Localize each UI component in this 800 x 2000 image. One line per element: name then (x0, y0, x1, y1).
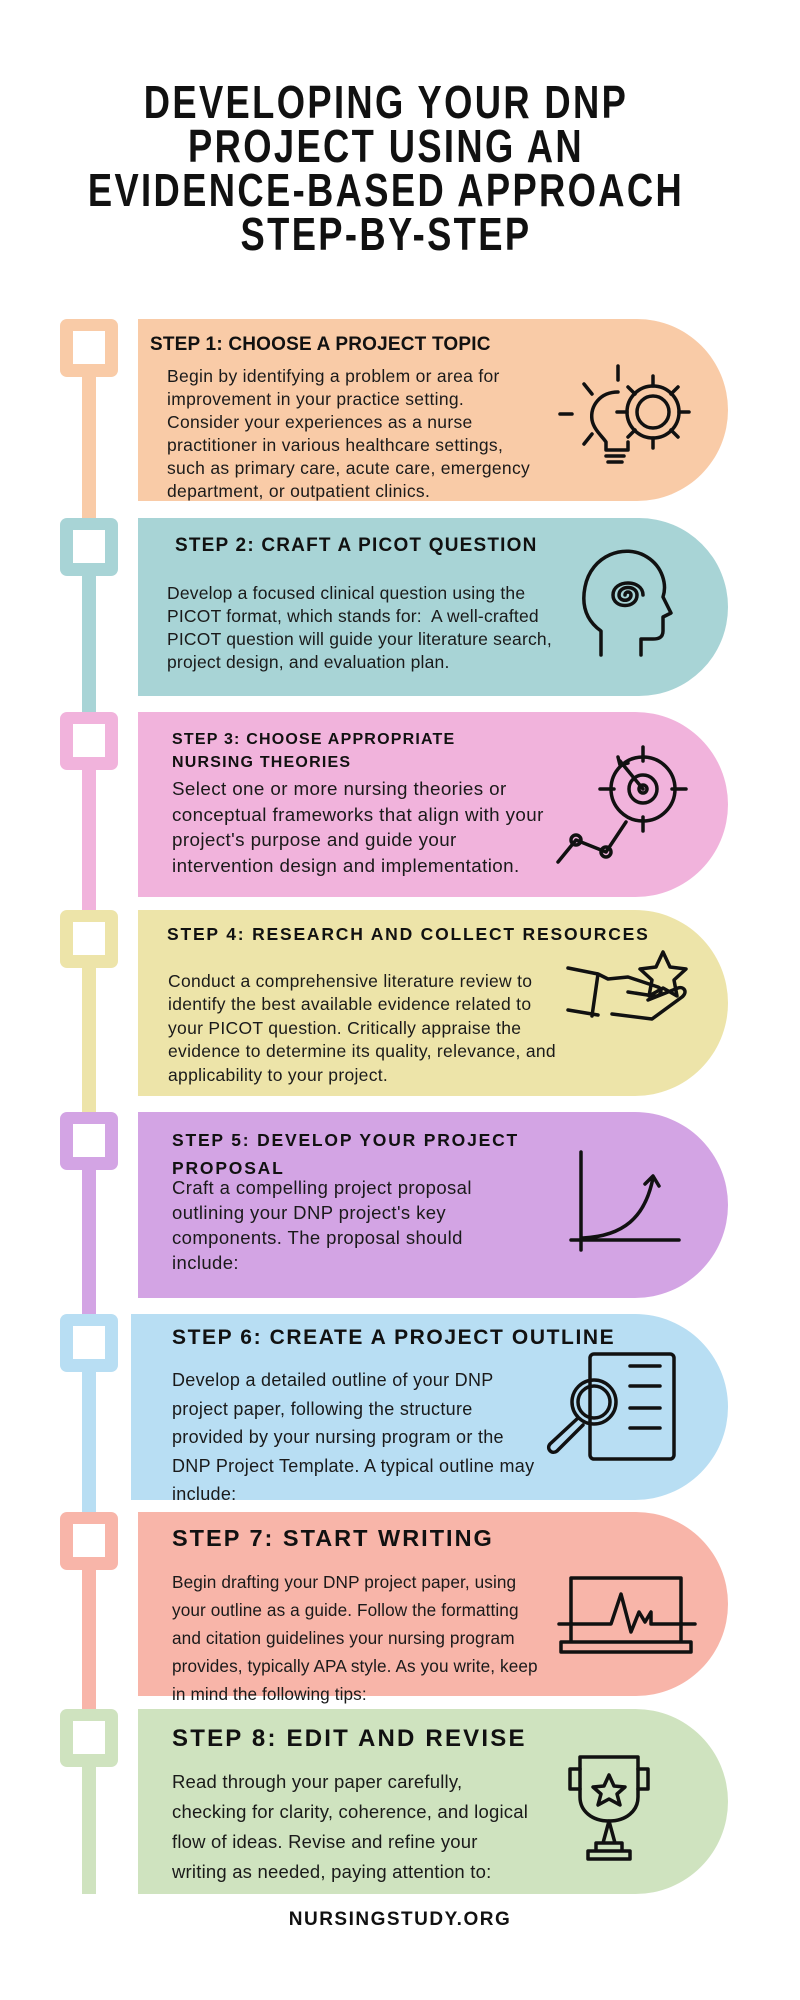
heading: step 3 (172, 731, 455, 771)
icon: document with magnifier (546, 1352, 676, 1461)
heading: step 3: STEP 3: CHOOSE APPROPRIATE (172, 731, 455, 748)
body: step 6: provided by your nursing program or the (172, 1427, 504, 1447)
heading: step 5: STEP 5: DEVELOP YOUR PROJECT (172, 1130, 519, 1150)
body: step 8: writing as needed, paying attention to: (172, 1861, 491, 1882)
heading: step 6: STEP 6: CREATE A PROJECT OUTLINE (172, 1326, 615, 1349)
icon: growth graph (569, 1150, 681, 1252)
heading: step 5: PROPOSAL (172, 1158, 285, 1178)
body: step 3: Select one or more nursing theories or (172, 778, 507, 799)
body: step 1: Begin by identifying a problem or area for (167, 366, 500, 386)
body: step 4: identify the best available evidence related to (168, 994, 531, 1014)
title: EVIDENCE-BASED APPROACH (88, 164, 684, 216)
panel: step 7 (138, 1512, 728, 1696)
body: step 8 (172, 1771, 528, 1882)
body: step 8: Read through your paper carefully, (172, 1771, 462, 1792)
body: step 8: flow of ideas. Revise and refine your (172, 1831, 478, 1852)
panel: step 1 (138, 319, 728, 501)
heading: step 2: STEP 2: CRAFT A PICOT QUESTION (175, 535, 538, 556)
title: PROJECT USING AN (188, 120, 584, 172)
body: step 6 (172, 1370, 534, 1504)
body: step 4: evidence to determine its quality, relevance, and (168, 1041, 556, 1061)
body: step 1 (167, 366, 530, 501)
icon: hand with star (566, 950, 688, 1021)
title (88, 76, 684, 260)
body: step 3: conceptual frameworks that align with your (172, 804, 544, 824)
heading: step 7: STEP 7: START WRITING (172, 1525, 494, 1551)
icon: trophy (568, 1755, 650, 1861)
body: step 3: project's purpose and guide your (172, 829, 457, 850)
heading: step 5 (172, 1130, 519, 1178)
panel: step 3 (138, 712, 728, 897)
body: step 6: DNP Project Template. A typical outline may (172, 1456, 534, 1476)
body: step 2: PICOT format, which stands for: A well-crafted (167, 606, 539, 626)
panel: step 8 (138, 1709, 728, 1894)
body: step 2 (167, 583, 552, 672)
body: step 4 (168, 971, 556, 1085)
body: step 1: practitioner in various healthcare settings, (167, 435, 503, 455)
panel: step 4 (138, 910, 728, 1096)
body: step 7: provides, typically APA style. As you write, keep (172, 1656, 538, 1676)
icon: laptop with heartbeat (557, 1576, 697, 1654)
body: step 5 (172, 1177, 472, 1273)
timeline connectors (60, 319, 118, 1894)
body: step 1: improvement in your practice setting. (167, 389, 464, 409)
body: step 7: your outline as a guide. Follow the formatting (172, 1600, 519, 1620)
heading: step 1: STEP 1: CHOOSE A PROJECT TOPIC (150, 334, 491, 355)
heading: step 3: NURSING THEORIES (172, 754, 351, 771)
body: step 1: Consider your experiences as a nurse (167, 412, 473, 432)
body: step 8: checking for clarity, coherence, and logical (172, 1801, 528, 1822)
body: step 2: project design, and evaluation plan. (167, 652, 450, 672)
body: step 5: Craft a compelling project proposal (172, 1177, 472, 1198)
body: step 7: and citation guidelines your nursing program (172, 1628, 515, 1648)
panel: step 5 (138, 1112, 728, 1298)
icon: head with spiral (582, 550, 673, 657)
body: step 6: project paper, following the structure (172, 1398, 473, 1418)
body: step 3: intervention design and implementation. (172, 854, 520, 876)
footer: NURSINGSTUDY.ORG (289, 1909, 511, 1930)
body: step 1: department, or outpatient clinics. (167, 481, 430, 501)
body: step 2: PICOT question will guide your literature search, (167, 629, 552, 649)
heading: step 4: STEP 4: RESEARCH AND COLLECT RESOURCES (167, 924, 650, 944)
icon: target (556, 745, 688, 864)
body: step 7 (172, 1572, 538, 1704)
panel: step 6 (131, 1314, 728, 1500)
title: STEP-BY-STEP (241, 208, 531, 260)
body: step 1: such as primary care, acute care, emergency (167, 458, 530, 478)
body: step 4: applicability to your project. (168, 1065, 388, 1085)
title: DEVELOPING YOUR DNP (144, 76, 628, 128)
body: step 3 (172, 778, 544, 876)
body: step 6: Develop a detailed outline of your DNP (172, 1370, 494, 1390)
body: step 6: include: (172, 1484, 236, 1504)
body: step 4: your PICOT question. Critically appraise the (168, 1018, 521, 1038)
body: step 2: Develop a focused clinical question using the (167, 583, 525, 603)
heading: step 8: STEP 8: EDIT AND REVISE (172, 1725, 527, 1752)
panel: step 2 (138, 518, 728, 696)
icon: bulb and gear (558, 364, 691, 464)
body: step 5: components. The proposal should (172, 1227, 463, 1248)
body: step 5: outlining your DNP project's key (172, 1202, 446, 1223)
body: step 7: Begin drafting your DNP project paper, using (172, 1572, 516, 1592)
body: step 7: in mind the following tips: (172, 1684, 367, 1704)
body: step 5: include: (172, 1252, 239, 1273)
body: step 4: Conduct a comprehensive literature review to (168, 971, 532, 991)
